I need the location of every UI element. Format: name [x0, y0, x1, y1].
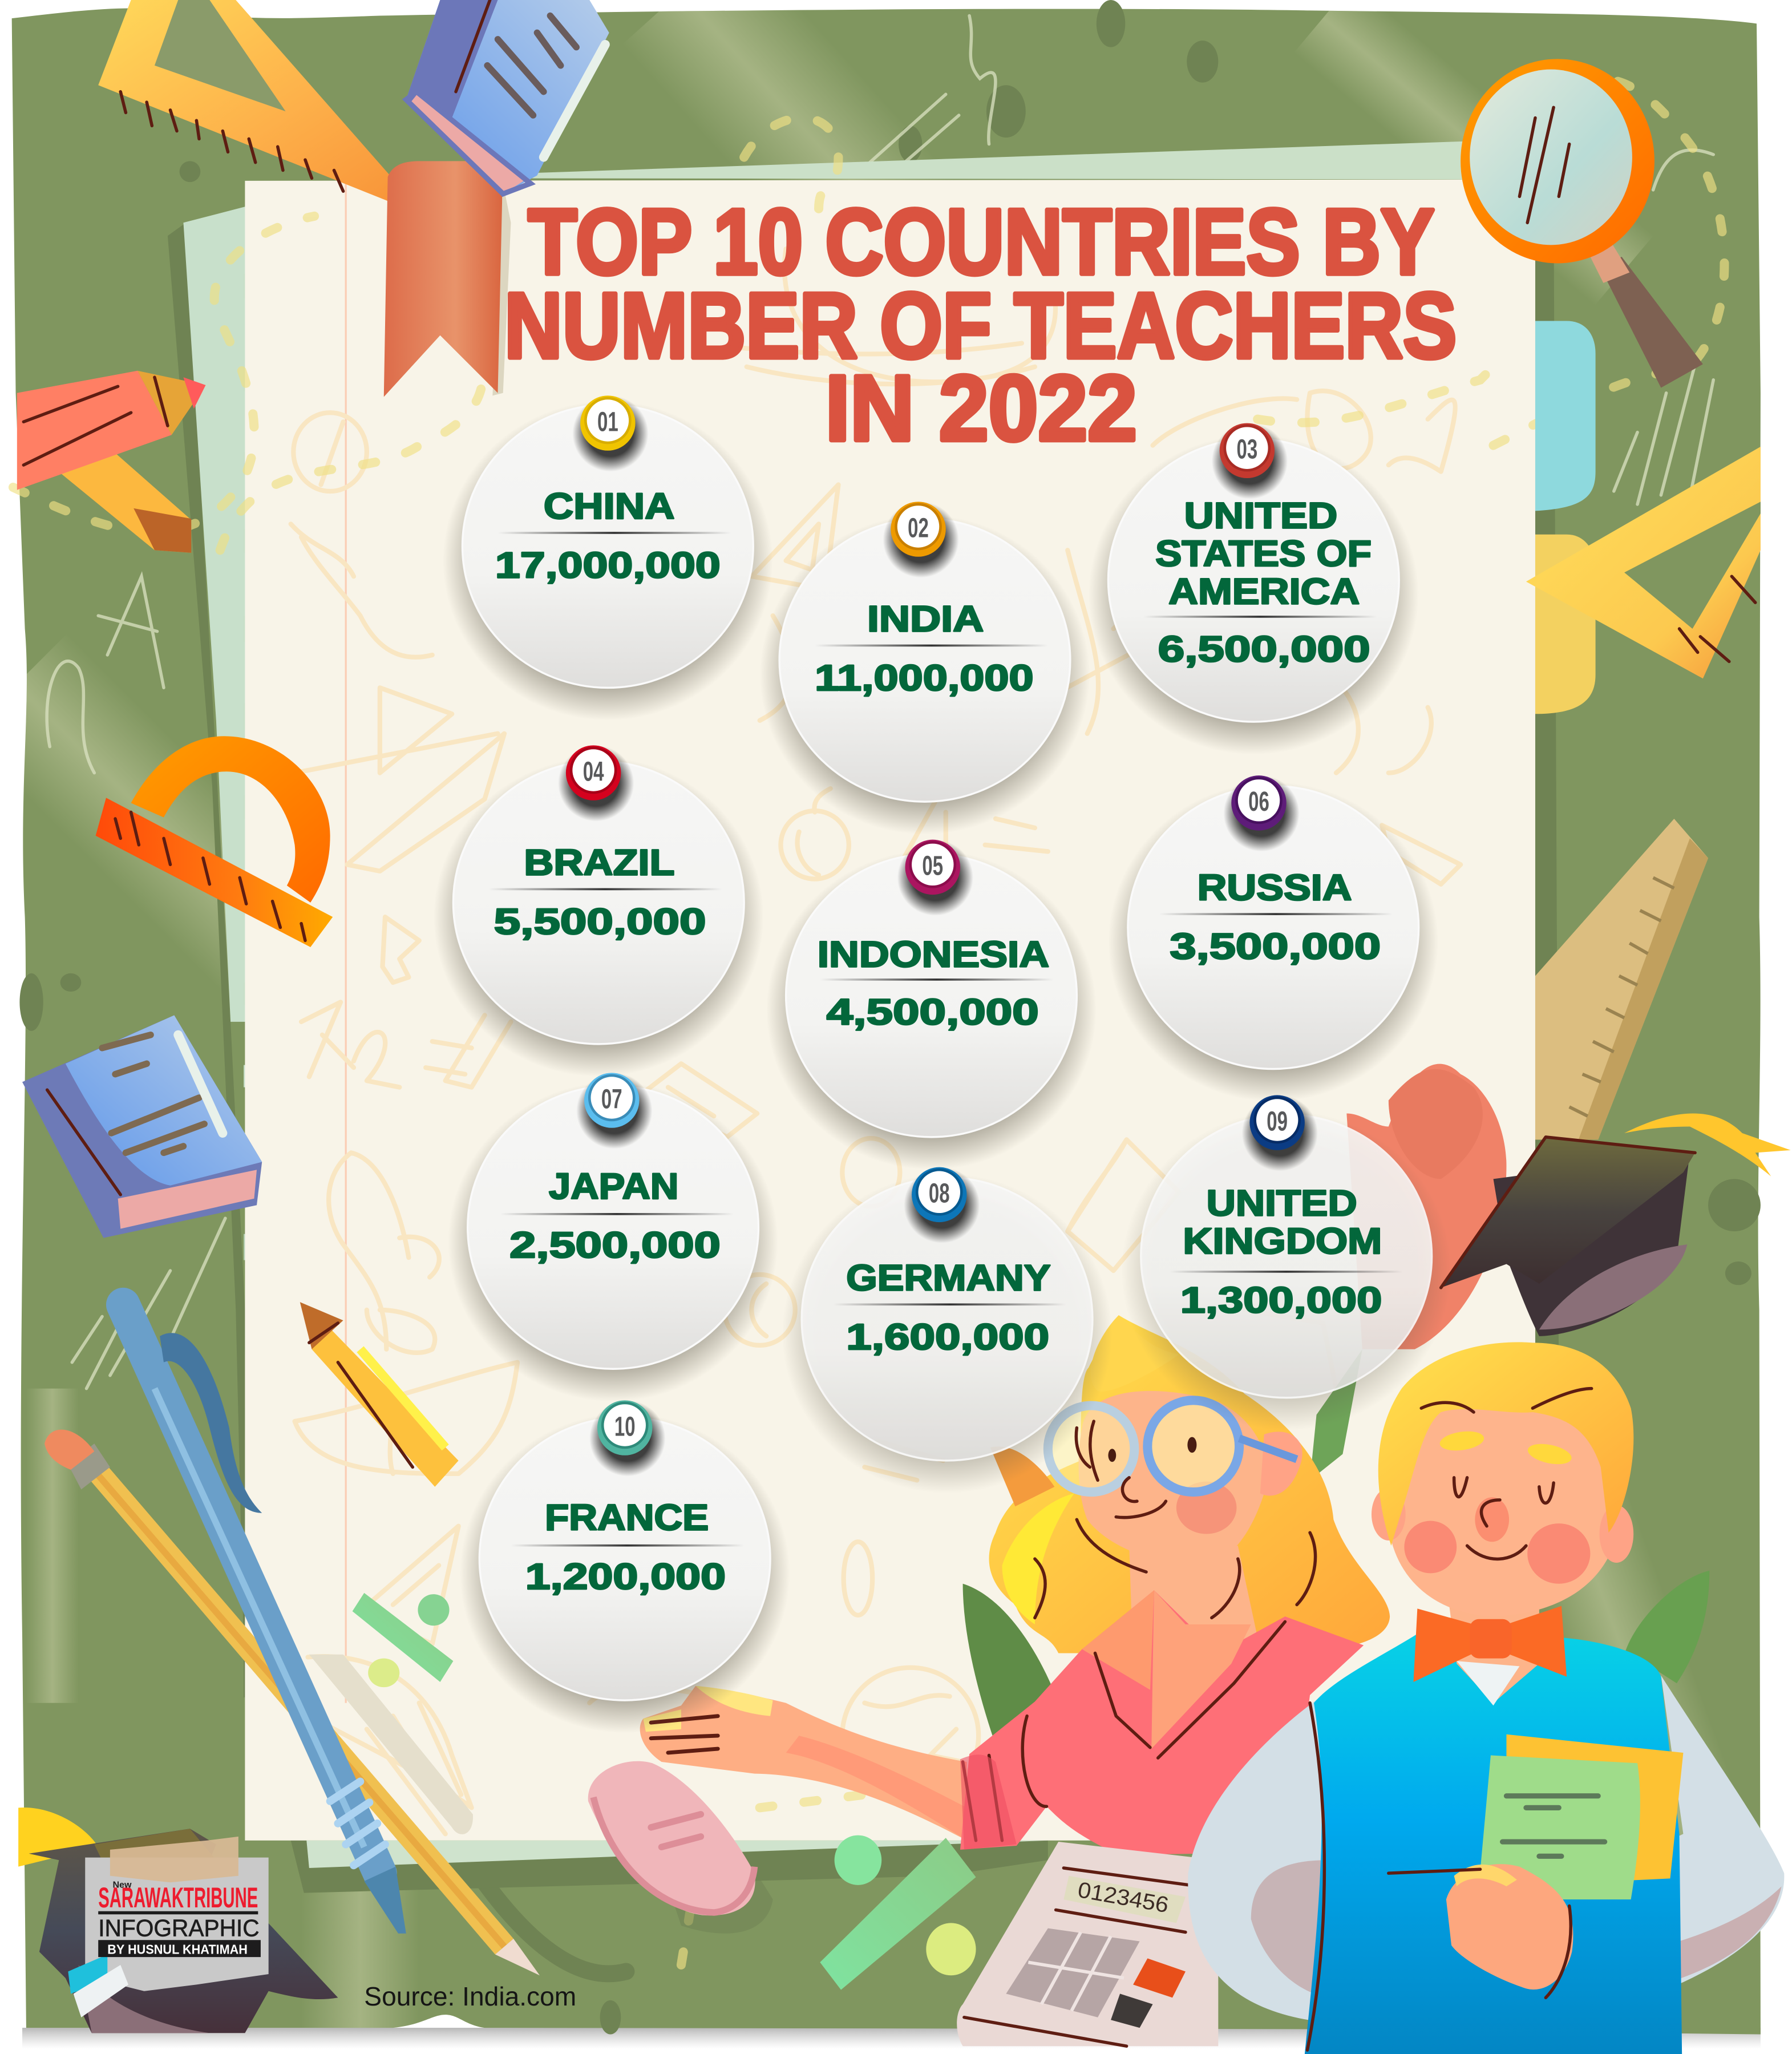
title line 3: IN 2022 — [826, 355, 1137, 460]
name: BRAZIL — [524, 842, 674, 883]
rank pin 08 — [904, 1167, 980, 1243]
value: 4,500,000 — [827, 991, 1039, 1032]
pink eraser — [588, 1761, 773, 1934]
card 08 Germany — [782, 1167, 1112, 1493]
rank pin 05 — [897, 840, 973, 916]
name: RUSSIA — [1198, 867, 1352, 908]
magnifier — [1461, 59, 1703, 388]
pencils left — [17, 371, 205, 553]
card 03 United States of America — [1089, 423, 1419, 754]
sticky tabs right — [1535, 321, 1596, 714]
logo wordmark: New — [112, 1879, 132, 1890]
hand — [1446, 1864, 1573, 1990]
value: 2,500,000 — [509, 1224, 721, 1265]
rank pin 07 — [576, 1073, 652, 1149]
woman teacher — [640, 1315, 1390, 1855]
book top — [406, 0, 609, 194]
bookmark ribbon — [384, 161, 511, 397]
man teacher — [1188, 1342, 1784, 2054]
rank pin 03 — [1212, 423, 1288, 499]
card 01 China — [443, 395, 773, 721]
name — [1183, 1183, 1382, 1261]
rank pin 08: 08 — [929, 1178, 950, 1209]
rank pin 04: 04 — [583, 756, 604, 787]
rank pin 10 — [589, 1400, 665, 1477]
bow tie — [1413, 1606, 1567, 1682]
name: AMERICA — [1168, 571, 1360, 612]
notebook back sheet and shadow — [168, 141, 1559, 1893]
neck — [1129, 1546, 1257, 1756]
doodles on page — [288, 249, 1461, 1834]
name: CHINA — [544, 486, 674, 527]
title — [504, 189, 1457, 460]
name: STATES OF — [1155, 533, 1372, 574]
name: UNITED — [1184, 495, 1337, 536]
hair — [989, 1315, 1390, 1653]
name: GERMANY — [846, 1257, 1050, 1298]
value: 1,300,000 — [1180, 1280, 1382, 1321]
blue pen — [123, 1305, 406, 1934]
notebook spiral tabs — [244, 274, 281, 1698]
name: KINGDOM — [1183, 1220, 1382, 1261]
chalk and dots — [353, 1593, 976, 1990]
Sarawak Tribune infographic logo — [68, 1837, 269, 2017]
wooden ruler — [1535, 819, 1708, 1139]
glasses — [1048, 1406, 1134, 1492]
title line 2: NUMBER OF TEACHERS — [504, 273, 1457, 378]
title line 1: TOP 10 COUNTRIES BY — [528, 189, 1434, 294]
graduation cap — [1441, 1114, 1791, 1336]
rank pin 06 — [1224, 775, 1300, 851]
card 02 India — [760, 502, 1090, 834]
rank pin 09: 09 — [1267, 1106, 1288, 1137]
card 04 Brazil — [434, 745, 764, 1077]
tulip — [1310, 1064, 1506, 1480]
blue book left — [22, 1015, 262, 1238]
card 09 United Kingdom — [1121, 1095, 1451, 1430]
value: 5,500,000 — [494, 901, 706, 942]
blouse — [960, 1590, 1364, 1855]
rank pin 07: 07 — [601, 1083, 622, 1114]
card 05 Indonesia — [766, 840, 1097, 1170]
name: JAPAN — [549, 1166, 678, 1207]
rank pin 01: 01 — [597, 406, 618, 437]
rank pin 10: 10 — [614, 1411, 636, 1442]
leaves — [963, 1571, 1709, 1781]
notebook cream page — [245, 180, 1535, 1841]
card 10 France — [460, 1400, 790, 1733]
byline: BY HUSNUL KHATIMAH — [107, 1942, 248, 1956]
vest — [1305, 1630, 1682, 2054]
card 06 Russia — [1108, 775, 1438, 1102]
source line: Source: India.com — [364, 1982, 576, 2011]
value: 1,600,000 — [846, 1316, 1049, 1357]
neck and collar — [1447, 1592, 1539, 1703]
face — [1079, 1391, 1268, 1566]
sleeves — [1188, 1695, 1327, 2023]
features — [1108, 1449, 1116, 1462]
value: 11,000,000 — [815, 657, 1034, 698]
small blue note — [68, 1955, 107, 1994]
teacher cap and logo corner — [18, 1808, 338, 2033]
outstretched arm — [640, 1686, 966, 1841]
protractor — [96, 736, 333, 947]
name: FRANCE — [545, 1497, 709, 1538]
logo card — [85, 1858, 269, 1991]
margin line — [345, 181, 346, 1703]
value: 6,500,000 — [1158, 628, 1370, 669]
tape — [110, 1837, 238, 1882]
long yellow pencil — [45, 1430, 540, 1975]
rank pin 02: 02 — [908, 512, 929, 543]
card 07 Japan — [448, 1073, 778, 1402]
hair — [1378, 1342, 1633, 1546]
calculator: 0123456 — [1076, 1878, 1171, 1918]
set square right — [1526, 447, 1761, 678]
calculator — [957, 1842, 1218, 2046]
value: 3,500,000 — [1170, 926, 1381, 967]
Sarawak Tribune infographic logo: SARAWAKTRIBUNE — [98, 1881, 258, 1914]
small yellow pencil — [300, 1302, 459, 1487]
rank pin 03: 03 — [1236, 434, 1257, 465]
pen shadow on page — [309, 1655, 473, 1834]
set square top left — [98, 0, 426, 216]
rank pin 02 — [883, 502, 959, 577]
value: 1,200,000 — [525, 1556, 726, 1597]
books — [1506, 1734, 1683, 1886]
value: 17,000,000 — [495, 545, 721, 585]
rank pin 06: 06 — [1248, 786, 1269, 817]
name: INDONESIA — [818, 933, 1049, 975]
rank pin 01 — [572, 395, 649, 472]
face — [1384, 1400, 1624, 1616]
rank pin 05: 05 — [922, 851, 943, 882]
name — [1155, 495, 1372, 612]
rank pin 04 — [558, 745, 634, 822]
logo heading: INFOGRAPHIC — [98, 1915, 260, 1941]
rank pin 09 — [1242, 1095, 1318, 1171]
name: UNITED — [1207, 1183, 1357, 1224]
cheeks — [1404, 1521, 1457, 1573]
name: INDIA — [867, 599, 984, 640]
